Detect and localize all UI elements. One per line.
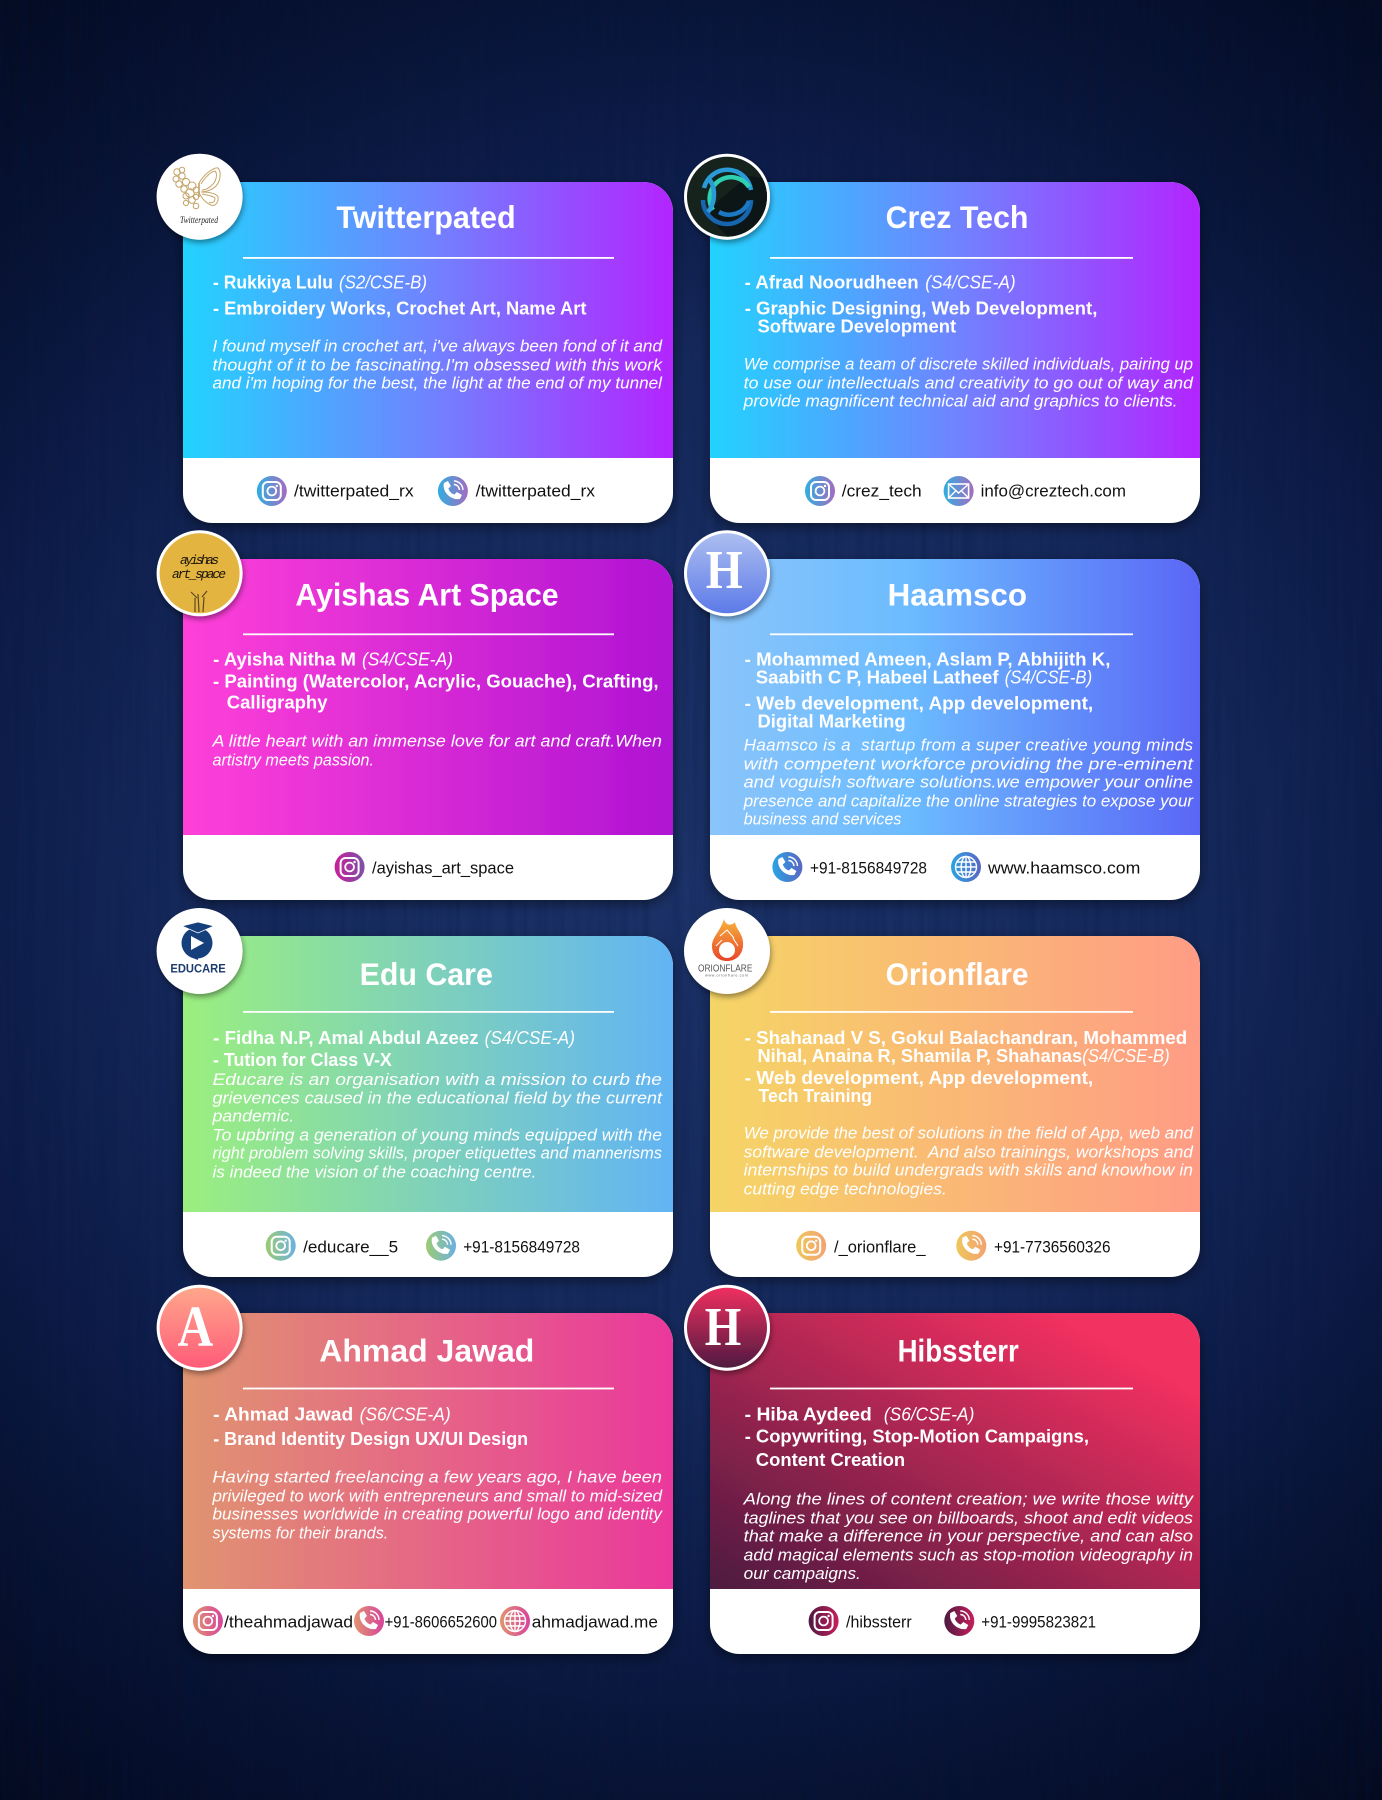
services xyxy=(745,1425,1089,1470)
services: - Web development, App development, xyxy=(745,692,1093,713)
logo: Educare: EDUCARE xyxy=(170,964,226,976)
contact: instagram: /twitterpated_rx xyxy=(294,483,414,501)
heading: Ahmad Jawad xyxy=(319,1333,534,1369)
contact: instagram: /_orionflare_ xyxy=(834,1238,926,1256)
panel: Haamsco xyxy=(686,532,1200,900)
divider xyxy=(770,1011,1133,1013)
logo: Hibssterr H xyxy=(686,1286,768,1369)
divider xyxy=(770,1388,1133,1389)
description: We comprise a team of discrete skilled individuals, pairing up xyxy=(744,354,1193,373)
description: is indeed the vision of the coaching centre. xyxy=(212,1162,536,1181)
description: Having started freelancing a few years ago, I have been xyxy=(212,1468,662,1487)
services: - Brand Identity Design UX/UI Design xyxy=(213,1428,528,1449)
description: taglines that you see on billboards, shoot and edit videos xyxy=(744,1509,1194,1528)
contact: phone: +91-7736560326 xyxy=(994,1238,1110,1256)
member xyxy=(213,1403,451,1424)
description: provide magnificent technical aid and graphics to clients. xyxy=(743,392,1178,411)
logo: Orionflare xyxy=(684,908,770,994)
contact: phone: +91-8156849728 xyxy=(463,1238,580,1256)
services: - Embroidery Works, Crochet Art, Name Art xyxy=(213,297,586,318)
description: Educare is an organisation with a mission to curb the xyxy=(212,1070,662,1089)
description: business and services xyxy=(744,809,902,828)
description: add magical elements such as stop-motion videography in xyxy=(744,1546,1193,1565)
description: thought of it to be fascinating.I'm obsessed with this work xyxy=(212,356,664,375)
heading: Orionflare xyxy=(886,956,1028,992)
panel: Orionflare xyxy=(684,908,1200,1277)
divider xyxy=(243,1011,614,1013)
heading: Twitterpated xyxy=(336,199,516,235)
description: right problem solving skills, proper etiquettes and mannerisms xyxy=(212,1144,662,1163)
card base xyxy=(710,936,1200,1277)
contact: instagram xyxy=(266,1231,398,1261)
contact: email: info@creztech.com xyxy=(981,483,1126,501)
contact: instagram: /educare__5 xyxy=(303,1238,398,1256)
logo: Ayishas: art_space xyxy=(172,567,226,582)
description: We provide the best of solutions in the field of App, web and xyxy=(744,1123,1194,1142)
contact: instagram xyxy=(809,1606,912,1636)
panel: Crez Tech xyxy=(686,155,1200,523)
contact: phone xyxy=(772,852,927,882)
description xyxy=(743,1490,1195,1583)
heading: Ayishas Art Space xyxy=(295,577,559,613)
description: internships to build undergrads with skills and knowhow in xyxy=(744,1160,1193,1179)
description: and i'm hoping for the best, the light at the end of my tunnel xyxy=(212,374,663,393)
description: cutting edge technologies. xyxy=(744,1179,947,1198)
logo: Haamsco H: H xyxy=(706,539,743,600)
contact: phone: +91-8156849728 xyxy=(810,859,927,877)
contact: instagram: /crez_tech xyxy=(842,483,922,501)
description: businesses worldwide in creating powerful logo and identity xyxy=(212,1505,663,1524)
services: - Tution for Class V-X xyxy=(213,1049,392,1070)
description xyxy=(212,1468,663,1543)
contact: phone: +91-8606652600 xyxy=(385,1613,497,1631)
divider xyxy=(770,633,1133,635)
logo: Orionflare: www.orionflare.com xyxy=(705,974,748,978)
contact: instagram: /ayishas_art_space xyxy=(372,859,514,877)
logo: Ayishas: ayishas xyxy=(180,553,219,568)
members: - Mohammed Ameen, Aslam P, Abhijith K, xyxy=(745,648,1110,669)
logo: Hibssterr H: H xyxy=(705,1296,741,1357)
description: and voguish software solutions.we empower your online xyxy=(744,773,1193,792)
panel: Hibssterr xyxy=(686,1286,1200,1654)
logo: Twitterpated butterfly: Twitterpated xyxy=(180,215,218,225)
services: Tech Training xyxy=(758,1085,872,1106)
logo: Ayishas xyxy=(158,532,241,615)
logo: Crez Tech ring xyxy=(686,155,775,245)
members: Saabith C P, Habeel Latheef xyxy=(756,666,999,687)
contact: instagram xyxy=(335,852,514,882)
member: (S4/CSE-A) xyxy=(362,648,453,669)
card base xyxy=(710,559,1200,900)
card base xyxy=(183,936,673,1277)
member xyxy=(213,271,427,292)
heading: Hibssterr xyxy=(898,1333,1019,1369)
member: - Afrad Noorudheen xyxy=(745,271,919,292)
logo: Orionflare: ORIONFLARE xyxy=(698,963,752,975)
member xyxy=(745,1403,974,1424)
member xyxy=(745,271,1016,292)
card base xyxy=(183,559,673,900)
contact: website: www.haamsco.com xyxy=(987,859,1140,877)
services: Digital Marketing xyxy=(758,710,906,731)
divider xyxy=(243,257,614,259)
member: - Hiba Aydeed xyxy=(745,1403,872,1424)
members: - Shahanad V S, Gokul Balachandran, Mohammed xyxy=(745,1027,1187,1048)
services: Content Creation xyxy=(756,1449,905,1470)
contact: instagram xyxy=(796,1231,926,1261)
description: software development. And also trainings, workshops and xyxy=(744,1142,1194,1161)
contact: instagram: /hibssterr xyxy=(846,1613,912,1631)
contact: instagram xyxy=(257,476,414,506)
member: (S2/CSE-B) xyxy=(339,271,427,292)
description: artistry meets passion. xyxy=(212,750,374,769)
panel: Ayishas Art Space xyxy=(158,532,673,900)
contact: website xyxy=(500,1606,658,1636)
logo: Haamsco H xyxy=(686,532,768,615)
services: - Graphic Designing, Web Development, xyxy=(745,297,1097,318)
members: (S4/CSE-B) xyxy=(1005,666,1092,687)
heading: Edu Care xyxy=(360,956,493,992)
description xyxy=(744,1123,1194,1198)
description: that make a difference in your perspective, and can also xyxy=(744,1527,1193,1546)
description: to use our intellectuals and creativity to go out of way and xyxy=(744,373,1194,392)
description: I found myself in crochet art, i've always been fond of it and xyxy=(212,337,663,356)
logo: Ahmad A: A xyxy=(178,1294,213,1359)
members xyxy=(745,1027,1187,1066)
services xyxy=(213,670,659,712)
description: systems for their brands. xyxy=(212,1524,388,1543)
contact: instagram xyxy=(193,1606,353,1636)
description xyxy=(743,354,1194,411)
services: - Web development, App development, xyxy=(745,1067,1093,1088)
services: Calligraphy xyxy=(227,691,328,712)
contact: phone xyxy=(438,476,596,506)
members: - Fidha N.P, Amal Abdul Azeez xyxy=(213,1027,479,1048)
members: Nihal, Anaina R, Shamila P, Shahanas xyxy=(758,1045,1082,1066)
services xyxy=(745,692,1093,731)
description: with competent workforce providing the pre-eminent xyxy=(744,755,1194,774)
card base xyxy=(183,1313,673,1654)
description xyxy=(212,337,664,393)
card base xyxy=(183,182,673,523)
divider xyxy=(770,257,1133,259)
contact: website: ahmadjawad.me xyxy=(532,1613,658,1631)
description: pandemic. xyxy=(211,1107,294,1126)
card base xyxy=(710,1313,1200,1654)
contact: phone xyxy=(944,1606,1096,1636)
description xyxy=(211,732,662,769)
member: (S6/CSE-A) xyxy=(884,1403,974,1424)
card base xyxy=(710,182,1200,523)
contact: website xyxy=(951,852,1140,882)
member: (S4/CSE-A) xyxy=(925,271,1016,292)
logo: Educare xyxy=(157,908,243,994)
member: (S6/CSE-A) xyxy=(360,1403,451,1424)
contact: instagram: /theahmadjawad xyxy=(224,1613,353,1631)
description: privileged to work with entrepreneurs and small to mid-sized xyxy=(212,1487,663,1506)
contact: phone: /twitterpated_rx xyxy=(476,483,596,501)
members xyxy=(745,648,1110,687)
contact: instagram xyxy=(805,476,922,506)
divider xyxy=(243,1388,614,1389)
description: our campaigns. xyxy=(744,1564,861,1583)
services: - Copywriting, Stop-Motion Campaigns, xyxy=(745,1425,1089,1446)
member: - Ayisha Nitha M xyxy=(213,648,356,669)
member: - Ahmad Jawad xyxy=(213,1403,353,1424)
description: A little heart with an immense love for art and craft.When xyxy=(211,732,662,751)
description: To upbring a generation of young minds equipped with the xyxy=(212,1126,662,1145)
heading: Crez Tech xyxy=(886,199,1028,235)
members: (S4/CSE-B) xyxy=(1082,1045,1170,1066)
panel: Ahmad Jawad xyxy=(158,1286,673,1654)
panel: Twitterpated xyxy=(157,154,673,523)
services xyxy=(745,297,1097,336)
heading: Haamsco xyxy=(888,577,1027,613)
description: Along the lines of content creation; we write those witty xyxy=(743,1490,1195,1509)
description: grievences caused in the educational field by the current xyxy=(212,1089,663,1108)
description: Haamsco is a startup from a super creative young minds xyxy=(744,736,1194,755)
logo: Ahmad A xyxy=(158,1286,241,1369)
description xyxy=(211,1070,663,1181)
member: - Rukkiya Lulu xyxy=(213,271,333,292)
logo: Twitterpated butterfly xyxy=(157,154,243,240)
contact: phone: +91-9995823821 xyxy=(981,1613,1096,1631)
contact: email xyxy=(944,476,1126,506)
contact: phone xyxy=(956,1231,1110,1261)
services: - Painting (Watercolor, Acrylic, Gouache), Crafting, xyxy=(213,670,659,691)
panel: Edu Care xyxy=(157,908,673,1277)
member xyxy=(213,648,453,669)
description xyxy=(743,736,1194,828)
description: presence and capitalize the online strategies to expose your xyxy=(743,792,1194,811)
members: (S4/CSE-A) xyxy=(485,1027,575,1048)
contact: phone xyxy=(354,1606,497,1636)
services xyxy=(745,1067,1093,1106)
divider xyxy=(243,633,614,635)
contact: phone xyxy=(426,1231,580,1261)
services: Software Development xyxy=(758,315,956,336)
